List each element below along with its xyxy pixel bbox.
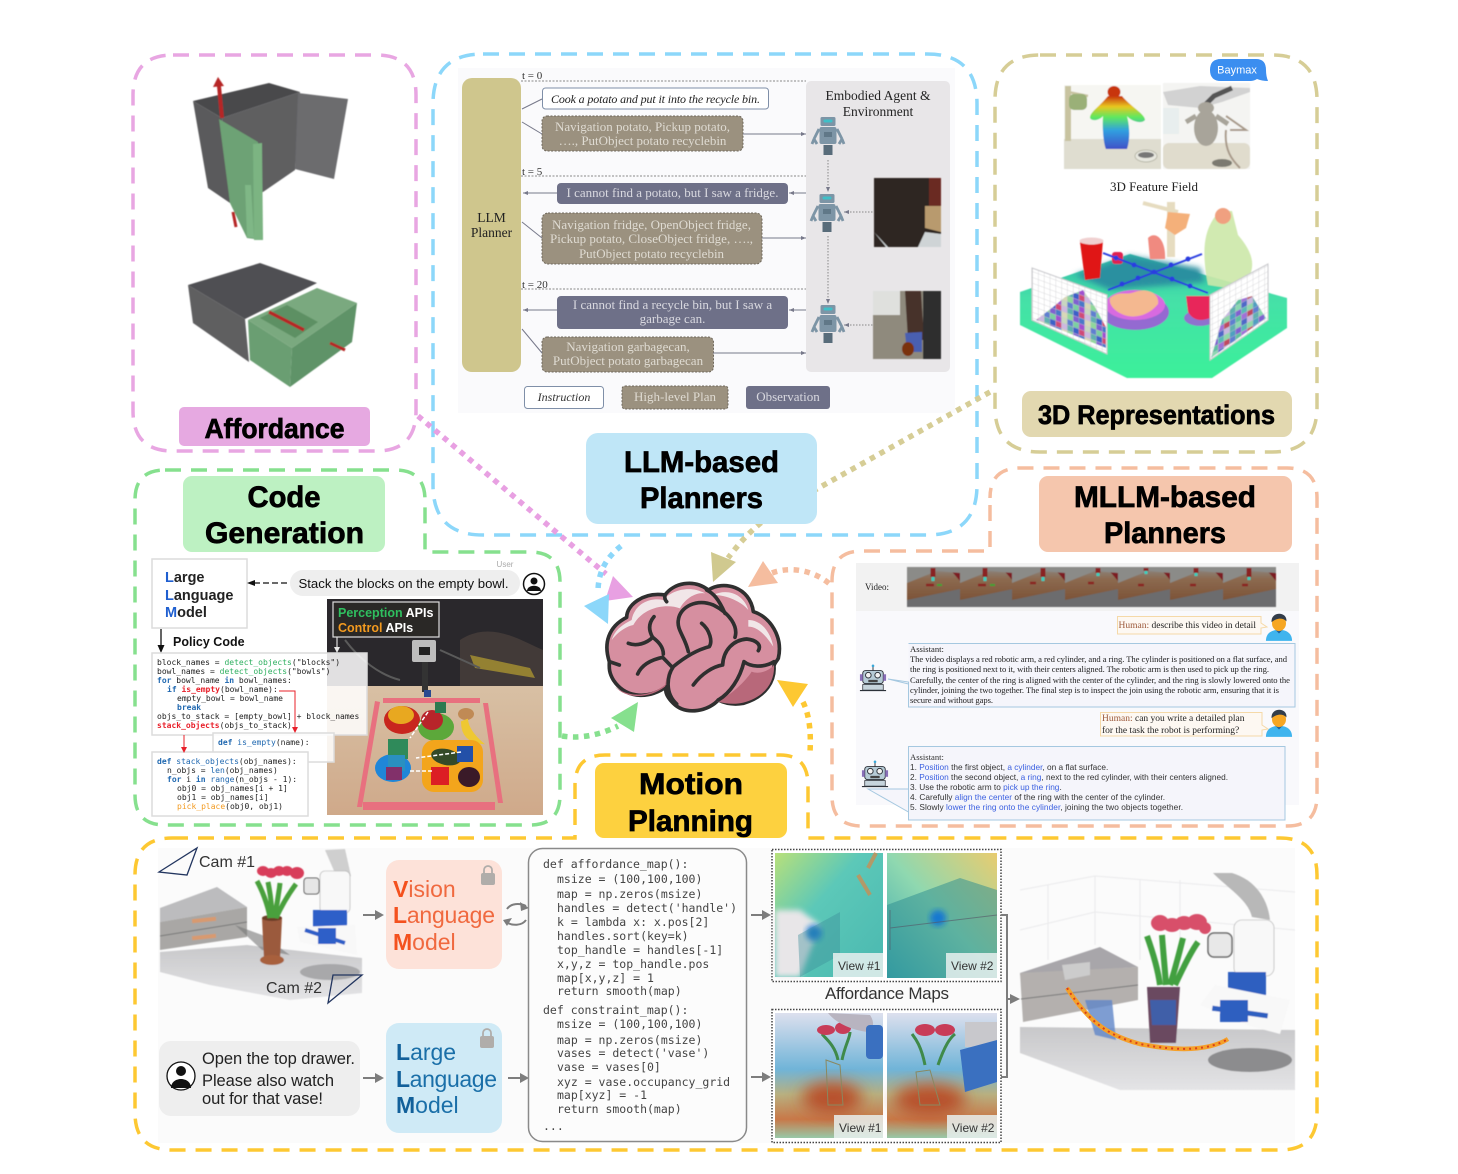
panel: MLLM-based planners [832,468,1317,826]
generated code block: return smooth(map) [557,984,682,998]
generated code block: top_handle = handles[-1] [557,943,723,957]
API legend [333,602,439,637]
human message 1 [1118,616,1267,634]
legend: observation: Observation [756,389,820,404]
scene: input point cloud [160,849,362,1000]
plan box 1 [542,116,743,151]
helper code: stack_objects: def stack_objects(obj_names): [157,757,297,766]
generated code block: handles.sort(key=k) [557,929,689,943]
scene: planned trajectory [1020,873,1295,1090]
assistant message 2: 2. Position the second object, a ring, next to the red cylinder, with their centers aligned. [910,772,1228,782]
large language model box: Language [165,588,233,604]
instruction bubble: Please also watch [202,1072,334,1090]
legend: observation [746,386,830,409]
badge: Baymax [1210,59,1268,81]
observation image: garbage can [873,291,941,359]
observation box 1 [557,183,788,204]
policy code block [152,653,367,735]
badge: Baymax: Baymax [1217,64,1257,76]
environment heading: Environment [843,104,913,119]
generated code block: map[xyz] = -1 [557,1088,647,1102]
timeline t=0: t = 0 [522,70,543,82]
helper code: stack_objects: obj0 = obj_names[i + 1] [177,784,288,793]
generated code block: def constraint_map(): [543,1003,688,1017]
generated code block: return smooth(map) [557,1102,682,1116]
generated code block: k = lambda x: x.pos[2] [557,915,709,929]
large language model box: Large [396,1039,456,1065]
observation box 2: garbage can. [640,311,705,326]
plan box 2: Navigation fridge, OpenObject fridge, [552,217,751,232]
icon: camera 2 [328,975,362,1003]
legend: instruction [524,386,604,408]
icon: assistant robot 2 [862,761,888,787]
icon: lock 1 [481,866,495,885]
human message 1: Human: describe this video in detail [1118,621,1256,631]
helper code: is_empty [213,733,334,762]
arrow: model to code [158,629,164,653]
icon: camera 1 [159,848,197,875]
icon: brain [607,583,779,711]
policy code block: for bowl_name in bowl_names: [157,675,292,685]
diagram background [458,68,955,413]
assistant message 1: Assistant: [910,644,944,654]
robot icon 2 [811,194,843,232]
label: Code Generation: Code [248,481,320,514]
label: Cam #1: Cam #1 [199,854,255,871]
heatmap: constraint view 1: View #1 [839,1121,882,1135]
large language model box: Model [396,1092,459,1118]
legend: instruction: Instruction [537,390,590,404]
panel: LLM-based planners [433,54,977,535]
LLM planner block [462,78,521,372]
image: 3D feature field scene [1020,202,1287,378]
label: Affordance: Affordance [204,413,344,444]
legend: high-level plan [622,386,728,409]
assistant message 2: 1. Position the first object, a cylinder, on a flat surface. [910,762,1108,772]
API legend: Control APIs [338,621,413,635]
plan box 2: PutObject potato recyclebin [579,246,725,261]
flow arrows [522,99,873,355]
chat background [856,563,1299,805]
assistant message 1: the ring is positioned next to it, with their centers aligned. The robotic arm is then used to pick up the ring. [910,664,1269,674]
dotted arrow: affordance to brain [418,416,633,601]
assistant message 1: secure and without gaps. [910,695,993,705]
icon: user [167,1062,195,1090]
image: cabinet with hinged door [193,77,348,240]
icon: user [524,574,544,594]
image: box with open drawer [188,263,357,387]
assistant message 2: 3. Use the robotic arm to pick up the ring. [910,782,1062,792]
vision language model box: Language [393,902,495,928]
timeline t=20: t = 20 [522,279,548,291]
generated code block: xyz = vase.occupancy_grid [557,1075,730,1089]
heatmap: constraint view 2 [887,1013,997,1138]
panel: affordance [133,55,416,451]
icon: assistant robot 1 [860,665,886,691]
human message 2 [1100,712,1268,736]
generated code block: ... [543,1119,564,1133]
video strip: Video: [865,582,889,592]
plan box 3: PutObject potato garbagecan [553,353,704,368]
label: MLLM-based Planners [1039,476,1292,552]
environment panel [806,81,950,372]
helper code: stack_objects: obj1 = obj_names[i] [177,793,269,802]
generated code block: map[x,y,z] = 1 [557,971,654,985]
caption: 3D feature field: 3D Feature Field [1110,179,1199,194]
arrows: inputs to models [363,910,529,1083]
helper code: stack_objects: for i in range(n_objs - 1): [167,774,297,784]
environment heading: Embodied Agent & [826,88,931,103]
instruction bubble: out for that vase! [202,1090,323,1108]
generated code block: msize = (100,100,100) [557,1017,702,1031]
label: Affordance [179,407,370,446]
heatmap: affordance view 2 [887,853,997,978]
plan box 1: …., PutObject potato recyclebin [559,133,727,148]
large language model box [386,1023,502,1133]
heatmap: affordance view 1: View #1 [838,959,881,973]
label: LLM-based Planners: Planners [640,482,763,515]
icon: person 1 [1266,614,1292,641]
helper code: stack_objects: pick_place(obj0, obj1) [177,802,283,811]
plan box 1: Navigation potato, Pickup potato, [555,119,730,134]
observation box 2 [557,296,788,329]
panel: motion planning pipeline [135,755,1317,1150]
policy code block: objs_to_stack = [empty_bowl] + block_names [157,712,359,721]
label: Cam #2: Cam #2 [266,980,322,997]
heatmap: affordance view 1 [775,853,883,977]
assistant message 2: 5. Slowly lower the ring onto the cylinder, joining the two objects together. [910,802,1183,812]
label: Motion Planning: Motion [639,768,743,801]
dotted arrow: code generation to brain [562,702,638,737]
affordance maps frame [772,850,1001,982]
generated code block: handles = detect('handle') [557,901,737,915]
robot icon 1 [812,117,844,155]
trajectory curve [1067,988,1228,1049]
robot icon 3 [812,305,844,343]
helper code: stack_objects [152,752,308,816]
assistant message 1: Carefully, the center of the ring is aligned with the center of the cylinder, and the ring is slowly lowered onto the [910,675,1290,685]
plan box 3 [542,337,714,372]
label: Motion Planning [595,763,787,838]
generated code block: map = np.zeros(msize) [557,887,702,901]
assistant message 2: Assistant: [910,752,944,762]
plan box 2: Pickup potato, CloseObject fridge, …., [550,231,753,246]
policy code block: break [177,703,201,712]
caption: affordance maps: Affordance Maps [825,984,949,1003]
assistant message 1 [888,644,1295,707]
bracket arrow: maps to trajectory [1001,915,1020,1077]
icon: person 2 [1266,710,1292,737]
observation image: fridge [874,178,941,247]
dotted arrow: motion planning to brain [777,680,810,752]
vision language model box [386,860,502,969]
image: robot arm and plush toy [1163,83,1250,169]
LLM planner block: LLM [477,210,506,225]
label: MLLM-based Planners: MLLM-based [1074,481,1256,514]
heatmap: constraint view 1 [775,1013,883,1138]
video strip [856,563,1299,611]
human message 2: Human: can you write a detailed plan [1102,714,1245,724]
observation box 1: I cannot find a potato, but I saw a fridge. [567,185,778,200]
heatmap: constraint view 2: View #2 [952,1121,995,1135]
large language model box: Language [396,1066,497,1092]
generated code block [528,848,746,1142]
prompt bubble [290,570,520,596]
API arrow [334,637,340,653]
large language model box: Large [165,570,204,586]
user label: User [497,560,514,569]
icon: model feedback cycle [503,902,529,926]
instruction bubble: Open the top drawer. [202,1050,355,1068]
scene photo [327,599,543,815]
policy code block: empty_bowl = bowl_name [177,694,283,703]
policy code block: if is_empty(bowl_name): [167,684,278,694]
observation box 2: I cannot find a recycle bin, but I saw a [573,297,772,312]
environment heading [826,88,931,119]
policy code heading: Policy Code [173,635,245,649]
large language model box [152,559,247,628]
generated code block: map = np.zeros(msize) [557,1033,702,1047]
generated code block: x,y,z = top_handle.pos [557,957,709,971]
label: MLLM-based Planners: Planners [1104,517,1226,550]
panel: 3D representations [995,55,1317,452]
vision language model box: Model [393,929,456,955]
assistant message 1: The video displays a red robotic arm, a red cylinder, and a ring. The cylinder is positioned on a flat surface, and [910,654,1288,664]
LLM planner block: Planner [471,225,513,240]
label: Code Generation: Generation [205,517,364,550]
assistant message 2: 4. Carefully align the center of the ring with the center of the cylinder. [910,792,1165,802]
helper code: stack_objects: n_objs = len(obj_names) [167,766,278,775]
instruction bubble [159,1041,360,1116]
image: feature field object [1064,85,1161,169]
policy code block: bowl_names = detect_objects("bowls") [157,667,330,676]
plan box 3: Navigation garbagecan, [566,339,690,354]
constraint maps frame [772,1010,1001,1142]
dotted arrow: 3D to brain [711,392,990,582]
assistant message 2 [868,746,1285,820]
arrows: code to maps [751,910,771,1082]
label: 3D Representations [1022,391,1292,437]
icon: lock 2 [480,1029,494,1048]
policy code block: block_names = detect_objects("blocks") [157,658,340,667]
label: LLM-based Planners: LLM-based [624,446,779,479]
policy code block: stack_objects(objs_to_stack) [157,720,292,730]
generated code block: msize = (100,100,100) [557,872,702,886]
red call arrows [181,691,298,753]
label: LLM-based Planners [586,433,817,524]
dashed arrow: prompt to model [247,580,287,586]
prompt bubble: Stack the blocks on the empty bowl. [298,576,508,591]
heatmap: affordance view 2: View #2 [951,959,994,973]
generated code block: def affordance_map(): [543,857,688,871]
vision language model box: Vision [393,876,456,902]
generated code block: vase = vases[0] [557,1060,661,1074]
generated code block: vases = detect('vase') [557,1046,709,1060]
panel: code generation [135,470,560,825]
label: 3D Representations: 3D Representations [1038,400,1275,430]
legend: high-level plan: High-level Plan [634,389,716,404]
instruction box [542,88,768,109]
label: Code Generation [183,476,385,552]
large language model box: Model [165,605,207,621]
plan box 2 [542,213,762,264]
helper code: is_empty: def is_empty(name): [218,738,310,747]
dotted arrow: MLLM to brain [748,561,832,587]
timeline t=5: t = 5 [522,166,543,178]
instruction box: Cook a potato and put it into the recycle bin. [551,92,760,106]
API legend: Perception APIs [338,606,433,620]
label: Motion Planning: Planning [628,805,753,838]
pipeline background [158,848,1295,1143]
human message 2: for the task the robot is performing? [1102,725,1239,736]
dotted arrow: LLM to brain [584,546,621,624]
assistant message 1: cylinder, joining the two together. The final step is to inspect the join using the robotic arm, ensuring that it is [910,685,1280,695]
